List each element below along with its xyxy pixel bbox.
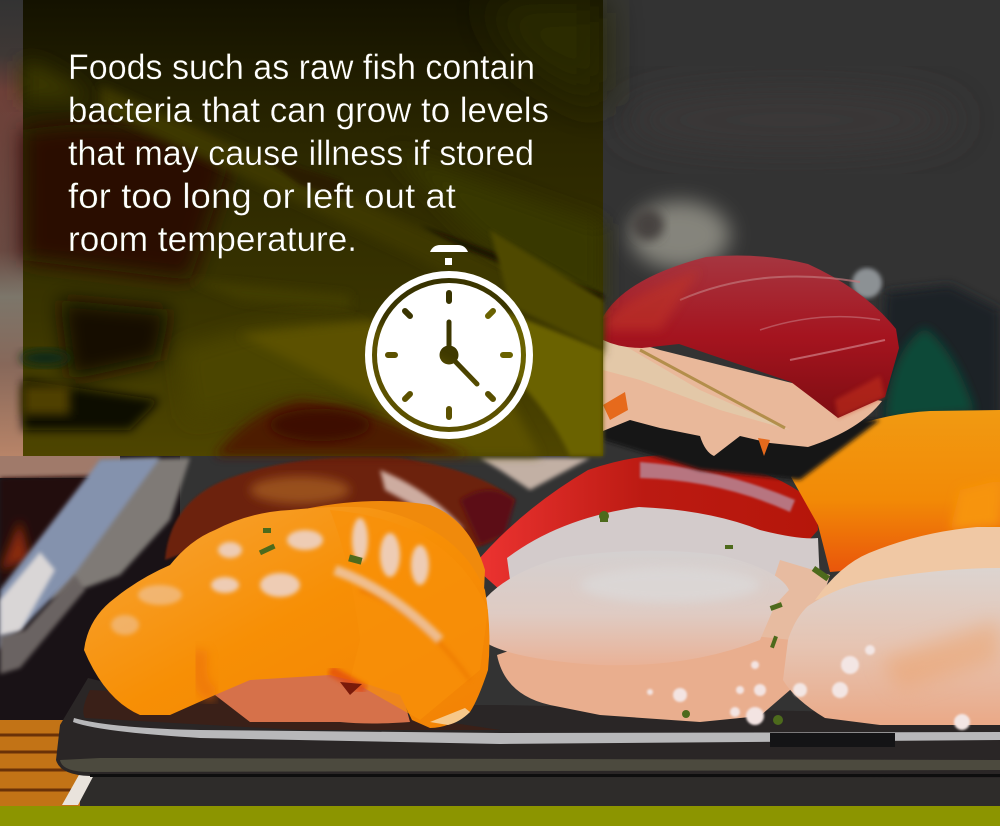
body text: [68, 48, 549, 259]
left strip behind panel: [0, 0, 23, 456]
right orange nigiri: [791, 410, 1000, 572]
rear eel nigiri: [165, 457, 515, 560]
body text: for too long or left out at: [68, 177, 456, 216]
bottom olive band: [0, 806, 1000, 826]
blurred shapes seen through panel: [20, 0, 603, 456]
rear red tuna: [473, 455, 818, 590]
soy dish: [0, 456, 190, 730]
scallop nigiri, centre: [473, 507, 830, 725]
raised tuna nigiri: [603, 256, 899, 480]
blurred background objects: [620, 90, 1000, 430]
icon: stopwatch: [365, 245, 533, 439]
plate: [56, 678, 1000, 778]
body text: that may cause illness if stored: [68, 134, 534, 173]
wood table: [0, 720, 1000, 806]
body text: bacteria that can grow to levels: [68, 91, 549, 130]
scallop nigiri, right: [783, 527, 1000, 730]
body text: Foods such as raw fish contain: [68, 48, 535, 87]
translucent olive text panel: [20, 0, 603, 456]
body text: room temperature.: [68, 220, 357, 259]
chives: [259, 511, 830, 725]
salmon nigiri: [84, 501, 489, 728]
